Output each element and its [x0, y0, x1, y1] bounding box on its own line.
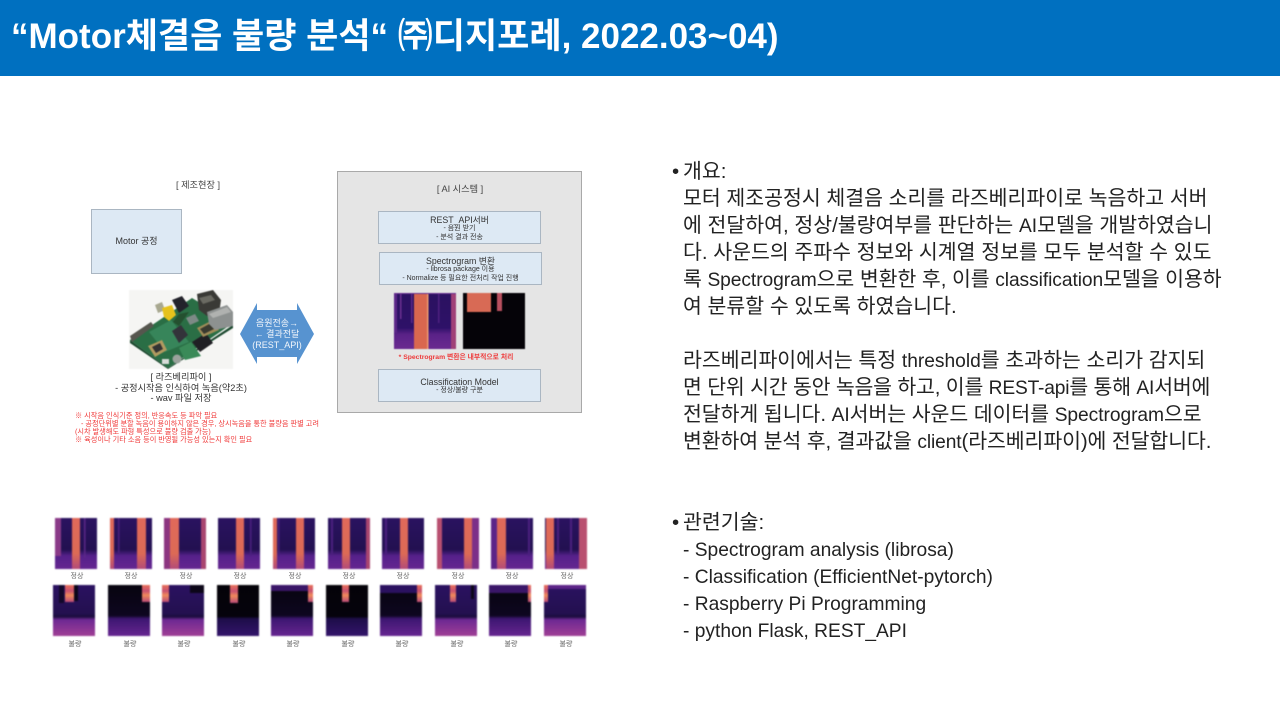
arrow: bidirectional data transfer [240, 303, 314, 364]
panel: AI system [337, 171, 582, 413]
raspberry pi description [115, 372, 247, 403]
box: spectrogram conversion: - librosa package 이용 [426, 266, 495, 273]
text: 불량 [124, 641, 136, 648]
red notes: (시차 발생해도 파형 특성으로 불량 검출 가능) [75, 427, 211, 436]
text block: related technologies: - Spectrogram analysis (librosa) [683, 540, 954, 561]
red notes: ※ 육성이나 기타 소음 등이 반영될 가능성 있는지 확인 필요 [75, 435, 252, 444]
text block: overview: 여 분류할 수 있도록 하였습니다. [683, 295, 957, 318]
arrow label: 음원전송→ [256, 318, 298, 328]
text: 불량 [178, 641, 190, 648]
text block: related technologies: • [672, 511, 679, 534]
box: REST API server: - 음원 받기 [444, 225, 475, 232]
header bar [0, 0, 1280, 76]
text block: overview: 전달하게 됩니다. AI서버는 사운드 데이터를 Spectrogram으로 [683, 403, 1202, 426]
text block: overview: 다. 사운드의 주파수 정보와 시계열 정보를 모두 분석할 수 있도 [683, 241, 1211, 264]
red note: spectrogram: * Spectrogram 변환은 내부적으로 처리 [399, 354, 513, 361]
box: classification model: - 정상/불량 구분 [436, 387, 483, 394]
text: 정상 [180, 573, 192, 580]
text block: related technologies: 관련기술: [683, 511, 764, 534]
defect sample captions [68, 640, 572, 648]
box: motor process: Motor 공정 [115, 236, 158, 246]
text: 정상 [234, 573, 246, 580]
text block: overview: 라즈베리파이에서는 특정 threshold를 초과하는 소리가 감지되 [683, 349, 1205, 372]
box: spectrogram conversion: - Normalize 등 필요한 전처리 작업 진행 [402, 274, 519, 282]
label: manufacturing site: [ 제조현장 ] [176, 180, 220, 190]
label: AI system: [ AI 시스템 ] [437, 184, 483, 194]
raspberry pi description: [ 라즈베리파이 ] [151, 372, 211, 382]
spectrogram: defect example [462, 292, 526, 350]
text block: overview [672, 160, 1222, 453]
arrow label: ← 결과전달 [255, 329, 299, 339]
box: spectrogram conversion: Spectrogram 변환 [426, 256, 495, 266]
red notes [75, 411, 319, 444]
text block: overview: 에 전달하여, 정상/불량여부를 판단하는 AI모델을 개발하였습니 [683, 214, 1213, 237]
red notes: - 공정단위별 분할 녹음이 용이하지 않은 경우, 상시녹음을 통한 불량음 판별 고려 [81, 419, 319, 428]
text: 불량 [451, 641, 463, 648]
text block: overview: 변환하여 분석 후, 결과값을 client(라즈베리파이)에 전달합니다. [683, 430, 1211, 453]
box: spectrogram conversion [379, 252, 542, 285]
text block: overview: • [672, 160, 679, 183]
box: REST API server: REST_API서버 [430, 215, 489, 225]
raspberry pi description: - wav 파일 저장 [151, 393, 211, 403]
text: 정상 [125, 573, 137, 580]
raspberry pi description: - 공정시작음 인식하여 녹음(약2초) [115, 382, 247, 392]
text: 불량 [560, 641, 572, 648]
text: 정상 [289, 573, 301, 580]
text: 정상 [71, 573, 83, 580]
box: REST API server: - 분석 결과 전송 [436, 234, 483, 240]
box: REST API server [378, 211, 541, 244]
text block: overview: 면 단위 시간 동안 녹음을 하고, 이를 REST-api를 통해 AI서버에 [683, 376, 1210, 399]
text: 정상 [506, 573, 518, 580]
text: 불량 [287, 641, 299, 648]
red notes: ※ 시작음 인식기준 정의, 반응속도 등 파악 필요 [75, 411, 217, 420]
box: classification model: Classification Model [420, 377, 499, 387]
normal samples row [55, 518, 587, 569]
box: classification model [378, 369, 541, 402]
arrow label: (REST_API) [252, 340, 302, 350]
text block: overview: 개요: [683, 160, 726, 183]
defect samples row [53, 585, 586, 636]
box: motor process [91, 209, 182, 274]
text: 불량 [396, 641, 408, 648]
text: 불량 [505, 641, 517, 648]
text: 불량 [233, 641, 245, 648]
text block: related technologies: - python Flask, REST_API [683, 621, 907, 642]
panel: system diagram [75, 171, 582, 444]
arrow label [252, 318, 302, 350]
title: “Motor체결음 불량 분석“ ㈜디지포레, 2022.03~04) [11, 17, 779, 56]
text: 불량 [342, 641, 354, 648]
text block: overview: 모터 제조공정시 체결음 소리를 라즈베리파이로 녹음하고 서버 [683, 187, 1208, 210]
text: 정상 [343, 573, 355, 580]
icon: raspberry pi board [129, 289, 234, 370]
text block: related technologies: - Raspberry Pi Programming [683, 594, 926, 615]
text: 불량 [69, 641, 81, 648]
text block: related technologies [672, 511, 993, 642]
text block: overview: 록 Spectrogram으로 변환한 후, 이를 classification모델을 이용하 [683, 268, 1222, 291]
normal sample captions [70, 572, 574, 580]
text: 정상 [397, 573, 409, 580]
text: 정상 [452, 573, 464, 580]
text: 정상 [561, 573, 573, 580]
text block: related technologies: - Classification (EfficientNet-pytorch) [683, 567, 993, 588]
spectrogram: normal example [393, 292, 457, 350]
